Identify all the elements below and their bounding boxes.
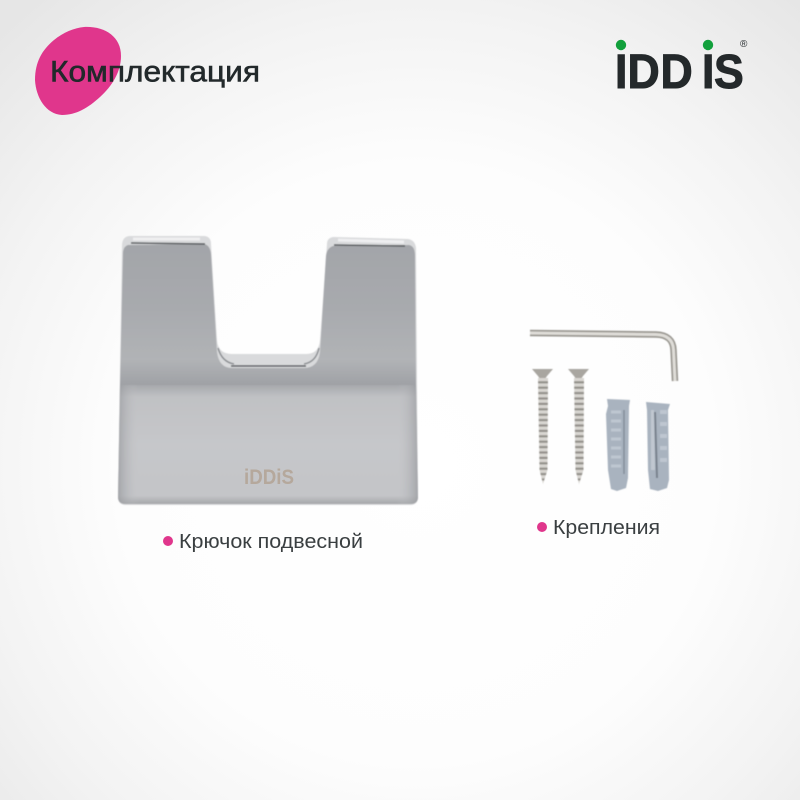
screw 2: [568, 369, 589, 484]
wall plug 1: [606, 399, 630, 491]
heading text: Комплектация: [50, 56, 260, 88]
pink blob behind heading: [35, 27, 121, 115]
hook chrome edge: [118, 236, 418, 505]
chrome highlights: [131, 243, 405, 366]
heading: Комплектация: [35, 27, 260, 115]
label: hook: Крючок подвесной: [179, 530, 363, 553]
label: hardware: Крепления: [553, 516, 660, 539]
screw 1: [532, 369, 553, 484]
product: mounting hardware: [530, 333, 675, 491]
hook lower face: [118, 385, 418, 504]
logo: IDDIS: IDDIS: [615, 45, 744, 98]
hex key: [530, 333, 675, 381]
product: wall hook: [118, 236, 418, 505]
hook upper face: [120, 244, 416, 385]
wall plug 2: [646, 402, 670, 491]
logo: IDDIS: ®: [740, 39, 748, 50]
engraved logo: iDDiS: [244, 466, 294, 489]
